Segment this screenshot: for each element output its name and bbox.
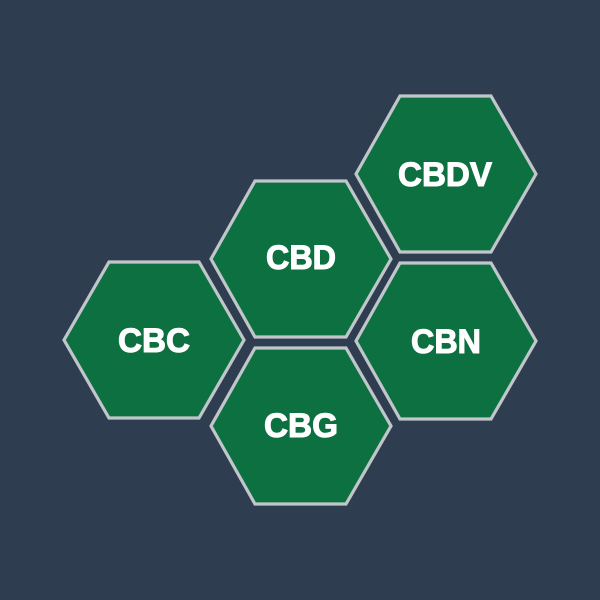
hexagon: CBG xyxy=(211,348,391,504)
hexagon: CBD: CBD xyxy=(266,239,336,277)
hexagon: CBG: CBG xyxy=(264,407,338,445)
hexagon: CBDV: CBDV xyxy=(398,156,492,194)
hexagon: CBDV xyxy=(356,96,536,252)
hexagon: CBC xyxy=(64,262,244,418)
hexagon: CBC: CBC xyxy=(118,322,190,360)
hexagon: CBN xyxy=(356,263,536,419)
hexagon: CBD xyxy=(211,181,391,337)
hexagon: CBN: CBN xyxy=(411,323,481,361)
